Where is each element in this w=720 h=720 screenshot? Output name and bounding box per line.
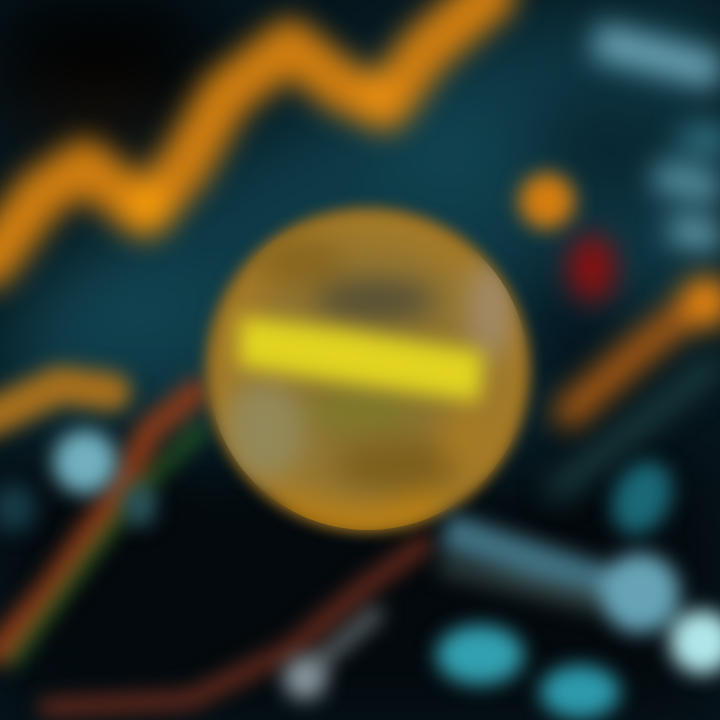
blue bars top right: [595, 40, 720, 238]
chart line: red and green rising line: [0, 385, 205, 665]
chart line: right orange segment: [570, 276, 720, 412]
red marker: [568, 234, 616, 302]
chart line: main orange wave: [0, 0, 490, 262]
chart line: lower red line: [40, 540, 430, 708]
coin: [205, 207, 531, 533]
orange dot: [519, 173, 575, 229]
chart line: dark teal diagonal: [550, 360, 720, 495]
coin detail shading: [225, 238, 512, 525]
blue dots and bars bottom: [0, 430, 720, 719]
coin yellow label band: [238, 316, 484, 402]
chart line: left orange segment: [0, 385, 112, 418]
